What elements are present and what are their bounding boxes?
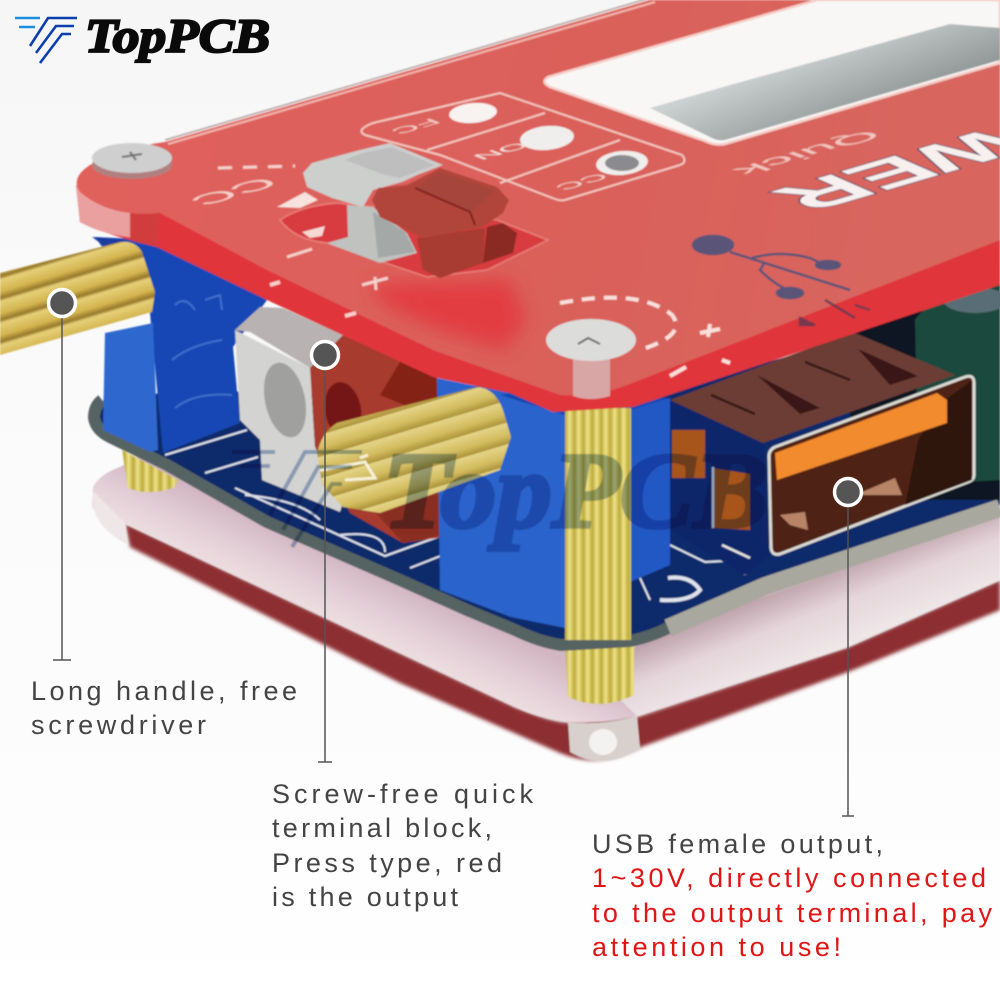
plate side edge <box>76 185 1000 412</box>
slot white mark <box>302 226 325 238</box>
caption 1: Long handle, free <box>31 676 297 706</box>
label CC left: CC <box>181 175 286 208</box>
switch slot <box>280 203 548 277</box>
display window <box>544 0 1000 145</box>
switch grey cap <box>303 143 443 207</box>
label ON: ON <box>468 141 534 161</box>
label FC: FC <box>385 117 446 136</box>
blue terminal block left <box>92 237 267 453</box>
blue terminal block middle <box>437 378 670 628</box>
indicator CC <box>595 149 649 177</box>
caption 2: is the output <box>272 882 458 912</box>
red acrylic top plate <box>76 0 1000 412</box>
caption 2: terminal block, <box>272 813 492 843</box>
label CC right: CC <box>549 172 614 192</box>
circuit board <box>94 300 1000 645</box>
caption 1: screwdriver <box>31 710 206 740</box>
logo icon <box>15 18 77 63</box>
TopPCB watermark <box>232 432 768 551</box>
terminal wire hole red <box>320 379 366 441</box>
dashed arc right <box>560 298 676 350</box>
capacitor green <box>850 285 1000 500</box>
leader line 2 <box>318 370 332 762</box>
terminal wire hole grey <box>258 359 312 441</box>
caption 3: USB female output, <box>592 829 883 859</box>
product photo <box>0 0 1000 761</box>
grey terminal <box>235 307 350 512</box>
USB side contacts <box>672 430 705 478</box>
brass standoff rear <box>122 450 178 492</box>
switch grey stem <box>327 205 417 263</box>
callout: terminal block <box>272 342 534 912</box>
plus mark <box>362 277 388 290</box>
callout: long handle <box>31 290 297 740</box>
leader line 3 <box>842 507 854 816</box>
USB symbol <box>693 236 850 298</box>
USB orange tongue <box>775 393 947 480</box>
marks near right screw <box>670 324 730 376</box>
brass handle middle <box>317 387 511 513</box>
brass standoff top front <box>565 408 631 640</box>
bright reflection on plate <box>370 280 525 350</box>
USB symbol shadow on edge <box>800 300 870 325</box>
warning text: to the output terminal, pay <box>592 898 992 928</box>
warning text: attention to use! <box>592 932 841 962</box>
dashed arc left <box>218 166 295 168</box>
screw right <box>546 319 636 399</box>
leader line 1 <box>53 318 71 660</box>
brand text Quick: Quick <box>726 128 888 178</box>
TopPCB watermark: TopPCB <box>383 432 768 551</box>
USB connector <box>670 332 974 575</box>
switch right dark base <box>483 223 517 263</box>
logo wordmark: TopPCB <box>85 10 270 63</box>
caption 2: Screw-free quick <box>272 779 534 809</box>
logo <box>15 10 270 63</box>
indicator FC <box>448 101 498 125</box>
board silkscreen traces <box>165 430 745 605</box>
slide switch <box>303 143 517 278</box>
brass handle left <box>0 242 155 355</box>
minus mark <box>287 249 312 257</box>
bottom acrylic plate <box>92 450 1000 761</box>
USB port opening <box>769 376 974 554</box>
white arrow <box>277 192 318 208</box>
callout: USB output <box>592 478 992 962</box>
plate surface <box>77 0 1000 395</box>
indicator ON <box>519 124 575 152</box>
marker dot 2 <box>312 342 338 368</box>
screw left <box>92 143 172 179</box>
caption 2: Press type, red <box>272 848 502 878</box>
switch label box <box>361 93 685 200</box>
marker dot 3 <box>834 478 862 506</box>
warning text: 1~30V, directly connected <box>592 863 986 893</box>
switch red base <box>417 228 485 278</box>
handle tip highlight <box>320 455 375 480</box>
marker dot 1 <box>48 290 76 316</box>
switch red lever <box>372 168 509 238</box>
brass standoff bottom front <box>565 645 634 704</box>
edge dots <box>270 282 356 316</box>
red terminal <box>310 335 443 543</box>
